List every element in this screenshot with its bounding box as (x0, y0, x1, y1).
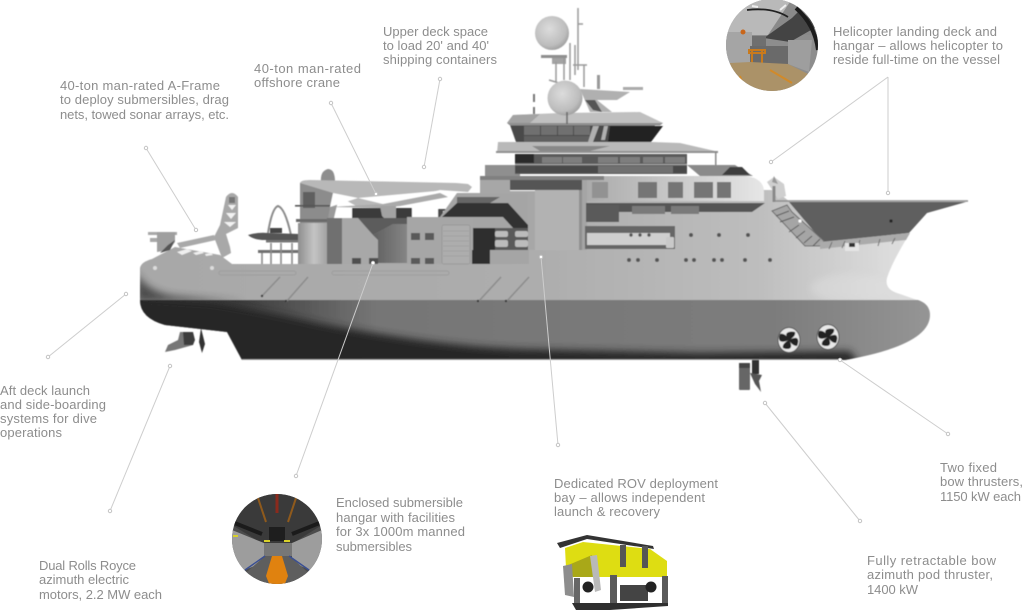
bridge (507, 112, 663, 142)
label: A-frame: nets, towed sonar arrays, etc. (60, 107, 229, 122)
photo: yellow ROV (557, 535, 668, 610)
label: azimuth motors: motors, 2.2 MW each (39, 587, 162, 602)
label: ROV bay: launch & recovery (554, 504, 660, 519)
label: azimuth motors: Dual Rolls Royce (39, 558, 136, 573)
label: bow thrusters (940, 460, 1023, 504)
mast and radomes (534, 8, 643, 124)
mid deckhouse (407, 193, 540, 264)
label: aft deck launch: and side-boarding (0, 397, 106, 412)
label: pod thruster: Fully retractable bow (867, 553, 997, 568)
forward accommodation block (586, 176, 765, 222)
label: offshore crane: offshore crane (254, 75, 340, 90)
photo: helicopter hangar (726, 0, 818, 92)
label: aft deck launch (0, 383, 106, 440)
label: bow thrusters: Two fixed (940, 460, 997, 475)
label: aft deck launch: Aft deck launch (0, 383, 90, 398)
portholes (627, 233, 772, 262)
label: helicopter deck: hangar – allows helicopter to (833, 38, 1003, 53)
submersible launch frame (248, 206, 302, 264)
crane boom (300, 180, 472, 222)
label: bow thrusters: bow thrusters, (940, 474, 1023, 489)
foredeck satcom dish (767, 176, 786, 202)
label: offshore crane: 40-ton man-rated (254, 61, 361, 76)
stern azimuth pod (165, 328, 205, 353)
label: submersible hangar: submersibles (336, 539, 412, 554)
bow flare underside and deck (772, 201, 968, 251)
label: upper deck space: to load 20' and 40' (383, 38, 489, 53)
hull rubbing strip (219, 271, 449, 275)
label: pod thruster: 1400 kW (867, 582, 919, 597)
label: offshore crane (254, 61, 361, 90)
ROV bay door (480, 178, 587, 250)
label: azimuth motors: azimuth electric (39, 572, 130, 587)
photo: submersible hangar (231, 493, 323, 590)
stern A-frame (148, 193, 238, 258)
bow thrusters (778, 324, 839, 352)
label: ROV bay: bay – allows independent (554, 490, 705, 505)
label: upper deck space: shipping containers (383, 52, 498, 67)
label: A-frame: to deploy submersibles, drag (60, 92, 229, 107)
label: helicopter deck (833, 24, 1003, 67)
bow pod thruster (739, 360, 762, 392)
superstructure decks (480, 142, 753, 180)
label: azimuth motors (39, 558, 162, 602)
crane pedestal (295, 169, 335, 264)
lifeboat davit slots (261, 277, 529, 302)
label: pod thruster: azimuth pod thruster, (867, 567, 993, 582)
label: A-frame (60, 78, 229, 122)
label: helicopter deck: Helicopter landing deck and (833, 24, 997, 39)
label: submersible hangar: for 3x 1000m manned (336, 524, 465, 539)
hull lower side (130, 298, 935, 365)
label: aft deck launch: systems for dive (0, 411, 97, 426)
label: A-frame: 40-ton man-rated A-Frame (60, 78, 220, 93)
label: pod thruster (867, 553, 997, 597)
forward side bay (585, 226, 675, 249)
leader lines (46, 77, 950, 523)
label: submersible hangar (336, 495, 465, 554)
ship (130, 8, 968, 392)
label: upper deck space: Upper deck space (383, 24, 488, 39)
hull upper side (136, 190, 920, 302)
hangar deck machinery gap (328, 201, 450, 218)
label: upper deck space (383, 24, 498, 67)
stern deck fittings (153, 249, 214, 270)
enclosed hangar block (327, 218, 412, 264)
label: aft deck launch: operations (0, 425, 62, 440)
boat bay (472, 228, 529, 264)
label: helicopter deck: reside full-time on the vessel (833, 52, 1000, 67)
label: ROV bay (554, 476, 718, 519)
label: bow thrusters: 1150 kW each (940, 489, 1021, 504)
label: submersible hangar: Enclosed submersible (336, 495, 463, 510)
label: ROV bay: Dedicated ROV deployment (554, 476, 718, 491)
label: submersible hangar: hangar with facilities (336, 510, 456, 525)
